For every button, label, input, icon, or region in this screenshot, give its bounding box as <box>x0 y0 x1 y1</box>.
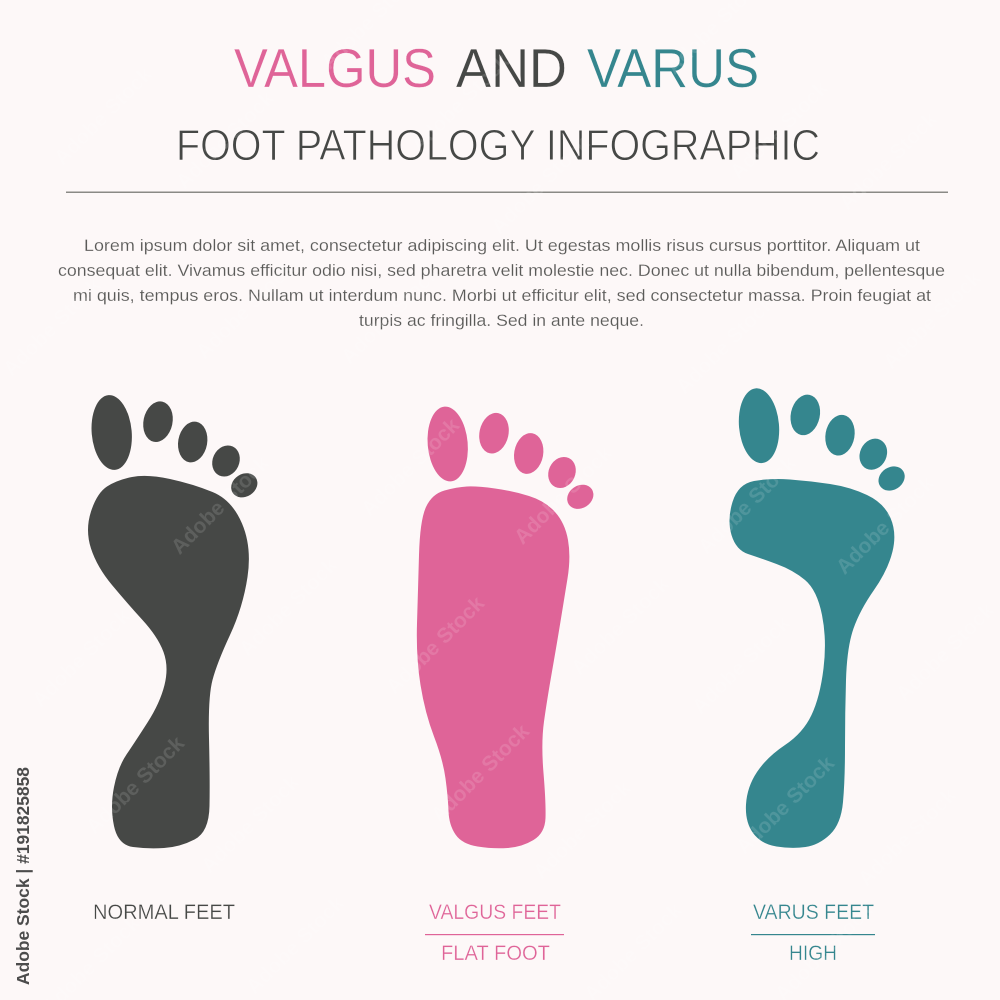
watermark: Adobe Stock <box>567 573 674 680</box>
watermark: Adobe Stock <box>529 777 636 884</box>
watermark: Adobe Stock <box>832 472 939 579</box>
watermark: Adobe Stock <box>382 592 489 699</box>
watermark: Adobe Stock <box>407 50 514 157</box>
watermark: Adobe Stock <box>694 452 801 559</box>
label: varus feet, high: HIGH <box>789 942 837 965</box>
watermark: Adobe Stock <box>726 77 833 184</box>
intro paragraph <box>58 236 945 330</box>
foot: normal <box>88 393 262 848</box>
watermark: Adobe Stock <box>337 262 444 369</box>
watermark: Adobe Stock <box>835 108 942 215</box>
label: normal feet: NORMAL FEET <box>93 901 235 924</box>
watermark: Adobe Stock <box>892 599 999 706</box>
title: AND <box>456 37 567 99</box>
label: varus feet, high <box>751 901 875 965</box>
watermark: Adobe Stock <box>487 132 594 239</box>
watermark: Adobe Stock <box>0 274 106 381</box>
watermark: Adobe Stock <box>172 87 279 194</box>
watermark: Adobe Stock <box>427 720 534 827</box>
watermark: Adobe Stock <box>192 257 299 364</box>
watermark: Adobe Stock <box>357 414 464 521</box>
label: valgus feet, flat foot: FLAT FOOT <box>441 942 550 965</box>
label: valgus feet, flat foot: VALGUS FEET <box>429 901 561 924</box>
watermark: Adobe Stock <box>50 63 157 170</box>
stock id sidebar: Adobe Stock | #191825858 <box>13 767 33 985</box>
intro paragraph: consequat elit. Vivamus efficitur odio nisi, sed pharetra velit molestie nec. Donec ut nulla bibendum, pellentesque <box>58 261 945 280</box>
watermark: Adobe Stock <box>672 292 779 399</box>
watermark: Adobe Stock <box>242 892 349 999</box>
watermark: Adobe Stock <box>235 554 342 661</box>
title: VALGUS <box>234 37 436 99</box>
title: VARUS <box>587 37 759 99</box>
intro paragraph: turpis ac fringilla. Sed in ante neque. <box>359 311 644 330</box>
label: varus feet, high: VARUS FEET <box>753 901 874 924</box>
valgus foot sole <box>417 486 569 848</box>
subtitle: FOOT PATHOLOGY INFOGRAPHIC <box>176 121 820 170</box>
watermark: Adobe Stock <box>732 752 839 859</box>
normal foot sole <box>88 476 249 848</box>
divider line <box>66 192 948 193</box>
watermark: Adobe Stock <box>688 612 795 719</box>
intro paragraph: Lorem ipsum dolor sit amet, consectetur adipiscing elit. Ut egestas mollis risus cursus porttitor. Aliquam ut <box>84 236 920 255</box>
label: valgus feet, flat foot <box>425 901 564 965</box>
watermark: Adobe Stock <box>879 267 986 374</box>
varus foot toes <box>736 387 909 495</box>
watermark: Adobe Stock <box>197 771 304 878</box>
valgus foot toes <box>425 405 598 514</box>
normal foot toes <box>89 393 262 502</box>
title <box>234 37 759 99</box>
foot: valgus <box>417 405 598 848</box>
watermark: Adobe Stock <box>28 605 135 712</box>
watermark: Adobe Stock <box>854 784 961 891</box>
foot: varus <box>729 387 909 848</box>
watermark: Adobe Stock <box>167 452 274 559</box>
intro paragraph: mi quis, tempus eros. Nullam ut interdum nunc. Morbi ut efficitur elit, sed consectetur massa. Proin feugiat at <box>73 286 931 305</box>
watermark: Adobe Stock <box>82 732 189 839</box>
varus foot sole <box>729 479 894 848</box>
watermark: Adobe Stock <box>510 442 617 549</box>
